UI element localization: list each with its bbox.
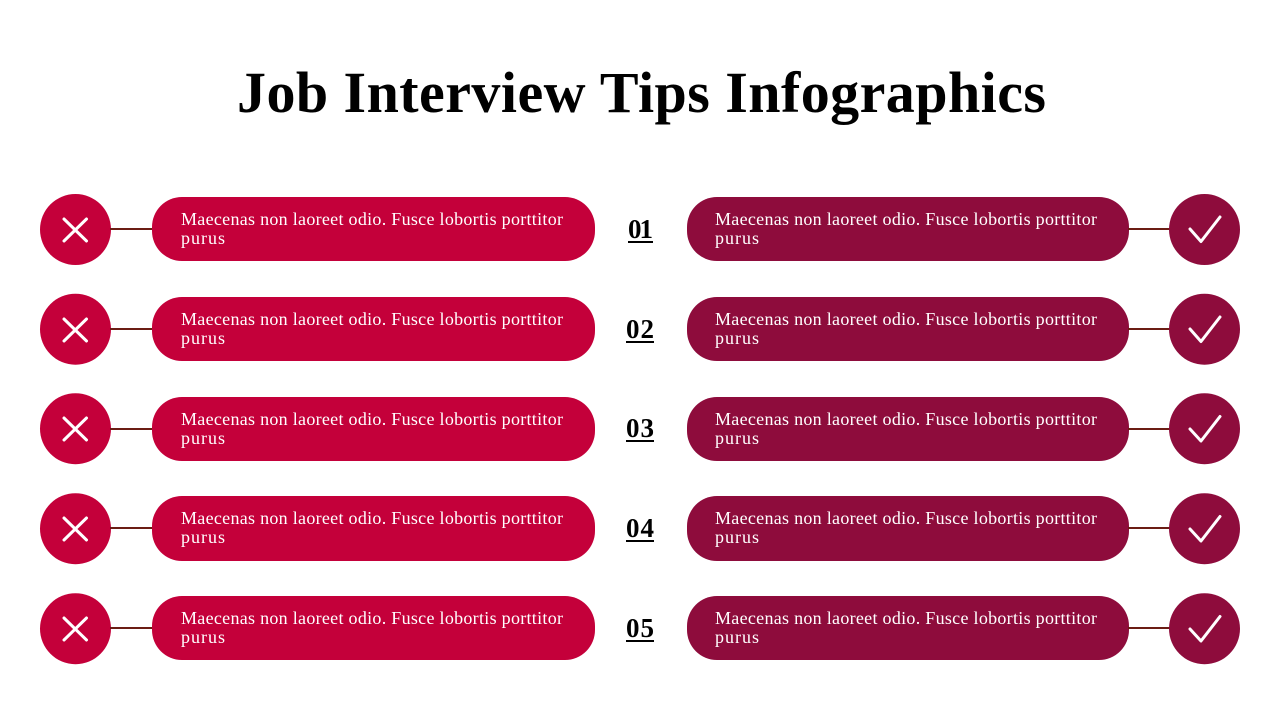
row 5	[40, 593, 1240, 664]
icon: cross	[40, 294, 111, 365]
pill: positive tip	[687, 397, 1129, 461]
row 2	[40, 294, 1240, 365]
connector: cross to pill	[110, 228, 153, 230]
pill: positive tip: Maecenas non laoreet odio. Fusce lobortis porttitor	[715, 508, 1097, 528]
icon: check	[1169, 393, 1240, 464]
connector: cross to pill	[110, 627, 153, 629]
connector: pill to check	[1128, 228, 1170, 230]
pill: positive tip: purus	[715, 428, 759, 448]
number: 04	[626, 513, 654, 543]
pill: positive tip	[687, 496, 1129, 561]
pill: negative tip: purus	[181, 328, 225, 348]
pill: positive tip: purus	[715, 527, 759, 547]
connector: pill to check	[1128, 627, 1170, 629]
pill: positive tip: purus	[715, 228, 759, 248]
number: 01	[628, 214, 653, 244]
number: 03	[626, 413, 654, 443]
pill: negative tip	[152, 496, 595, 561]
pill: positive tip: Maecenas non laoreet odio. Fusce lobortis porttitor	[715, 209, 1097, 229]
pill: negative tip	[152, 197, 595, 261]
icon: check	[1169, 493, 1240, 564]
connector: cross to pill	[110, 328, 153, 330]
pill: negative tip	[152, 397, 595, 461]
connector: cross to pill	[110, 428, 153, 430]
icon: check	[1169, 194, 1240, 265]
row 4	[40, 493, 1240, 564]
pill: negative tip: purus	[181, 428, 225, 448]
title: Job Interview Tips Infographics	[237, 60, 1046, 125]
pill: negative tip: Maecenas non laoreet odio. Fusce lobortis porttitor	[181, 209, 563, 229]
connector: pill to check	[1128, 328, 1170, 330]
pill: positive tip	[687, 596, 1129, 660]
icon: check	[1169, 294, 1240, 365]
icon: cross	[40, 493, 111, 564]
pill: negative tip: Maecenas non laoreet odio. Fusce lobortis porttitor	[181, 409, 563, 429]
icon: cross	[40, 194, 111, 265]
number: 02	[626, 314, 654, 344]
pill: positive tip: purus	[715, 328, 759, 348]
pill: positive tip: Maecenas non laoreet odio. Fusce lobortis porttitor	[715, 409, 1097, 429]
connector: pill to check	[1128, 527, 1170, 529]
pill: negative tip: purus	[181, 627, 225, 647]
row 1	[40, 194, 1240, 265]
connector: pill to check	[1128, 428, 1170, 430]
pill: positive tip: purus	[715, 627, 759, 647]
pill: negative tip: Maecenas non laoreet odio. Fusce lobortis porttitor	[181, 608, 563, 628]
pill: negative tip	[152, 297, 595, 361]
icon: cross	[40, 393, 111, 464]
pill: negative tip: Maecenas non laoreet odio. Fusce lobortis porttitor	[181, 309, 563, 329]
row 3	[40, 393, 1240, 464]
icon: cross	[40, 593, 111, 664]
connector: cross to pill	[110, 527, 153, 529]
pill: negative tip: purus	[181, 228, 225, 248]
icon: check	[1169, 593, 1240, 664]
number: 05	[626, 613, 654, 643]
pill: positive tip	[687, 197, 1129, 261]
pill: negative tip: purus	[181, 527, 225, 547]
pill: positive tip	[687, 297, 1129, 361]
pill: negative tip: Maecenas non laoreet odio. Fusce lobortis porttitor	[181, 508, 563, 528]
pill: negative tip	[152, 596, 595, 660]
pill: positive tip: Maecenas non laoreet odio. Fusce lobortis porttitor	[715, 309, 1097, 329]
pill: positive tip: Maecenas non laoreet odio. Fusce lobortis porttitor	[715, 608, 1097, 628]
